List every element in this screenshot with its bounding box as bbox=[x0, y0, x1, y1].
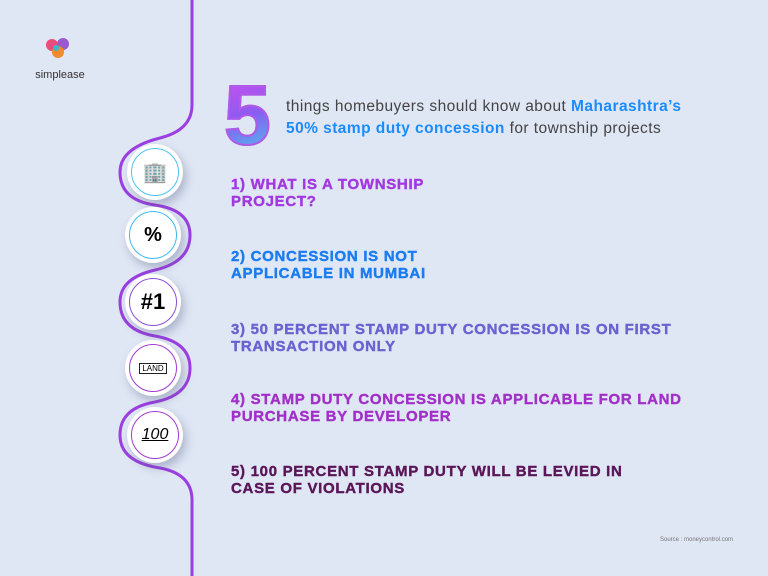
item 3 bbox=[230, 321, 671, 355]
item 4 bbox=[231, 391, 682, 425]
item 5: 5) 100 PERCENT STAMP DUTY WILL BE LEVIED IN bbox=[231, 463, 623, 480]
title text bbox=[286, 98, 681, 137]
item 2: 2) CONCESSION IS NOT bbox=[231, 248, 418, 265]
icon 1 building: 🏢 bbox=[143, 162, 167, 184]
item 1: PROJECT? bbox=[231, 193, 317, 210]
item 2: APPLICABLE IN MUMBAI bbox=[231, 265, 426, 282]
logo bbox=[35, 38, 85, 81]
icon 2 percent bbox=[125, 207, 181, 263]
item 2 bbox=[231, 248, 426, 282]
icon 5 100 bbox=[127, 407, 183, 463]
icon 5 100: 100 bbox=[142, 426, 168, 443]
icon 2 percent: % bbox=[144, 224, 162, 246]
icon 4 land bbox=[125, 340, 181, 396]
icon 3 #1: #1 bbox=[141, 289, 165, 314]
item 5 bbox=[231, 463, 623, 497]
item 3: TRANSACTION ONLY bbox=[231, 338, 396, 355]
item 4: PURCHASE BY DEVELOPER bbox=[231, 408, 451, 425]
title text: things homebuyers should know about Maharashtra’s bbox=[286, 98, 681, 115]
icon 1 building bbox=[127, 144, 183, 200]
icon 4 land: LAND bbox=[142, 364, 164, 372]
title text: 50% stamp duty concession for township projects bbox=[286, 120, 661, 137]
source: Source : moneycontrol.com bbox=[660, 537, 733, 543]
item 1: 1) WHAT IS A TOWNSHIP bbox=[231, 176, 424, 193]
item 1 bbox=[231, 176, 424, 210]
item 4: 4) STAMP DUTY CONCESSION IS APPLICABLE FOR LAND bbox=[231, 391, 682, 408]
logo: simplease bbox=[35, 69, 85, 81]
item 3: 3) 50 PERCENT STAMP DUTY CONCESSION IS ON FIRST bbox=[231, 321, 671, 338]
big 5: 5 bbox=[224, 68, 271, 162]
item 5: CASE OF VIOLATIONS bbox=[231, 480, 405, 497]
icon 3 #1 bbox=[125, 274, 181, 330]
